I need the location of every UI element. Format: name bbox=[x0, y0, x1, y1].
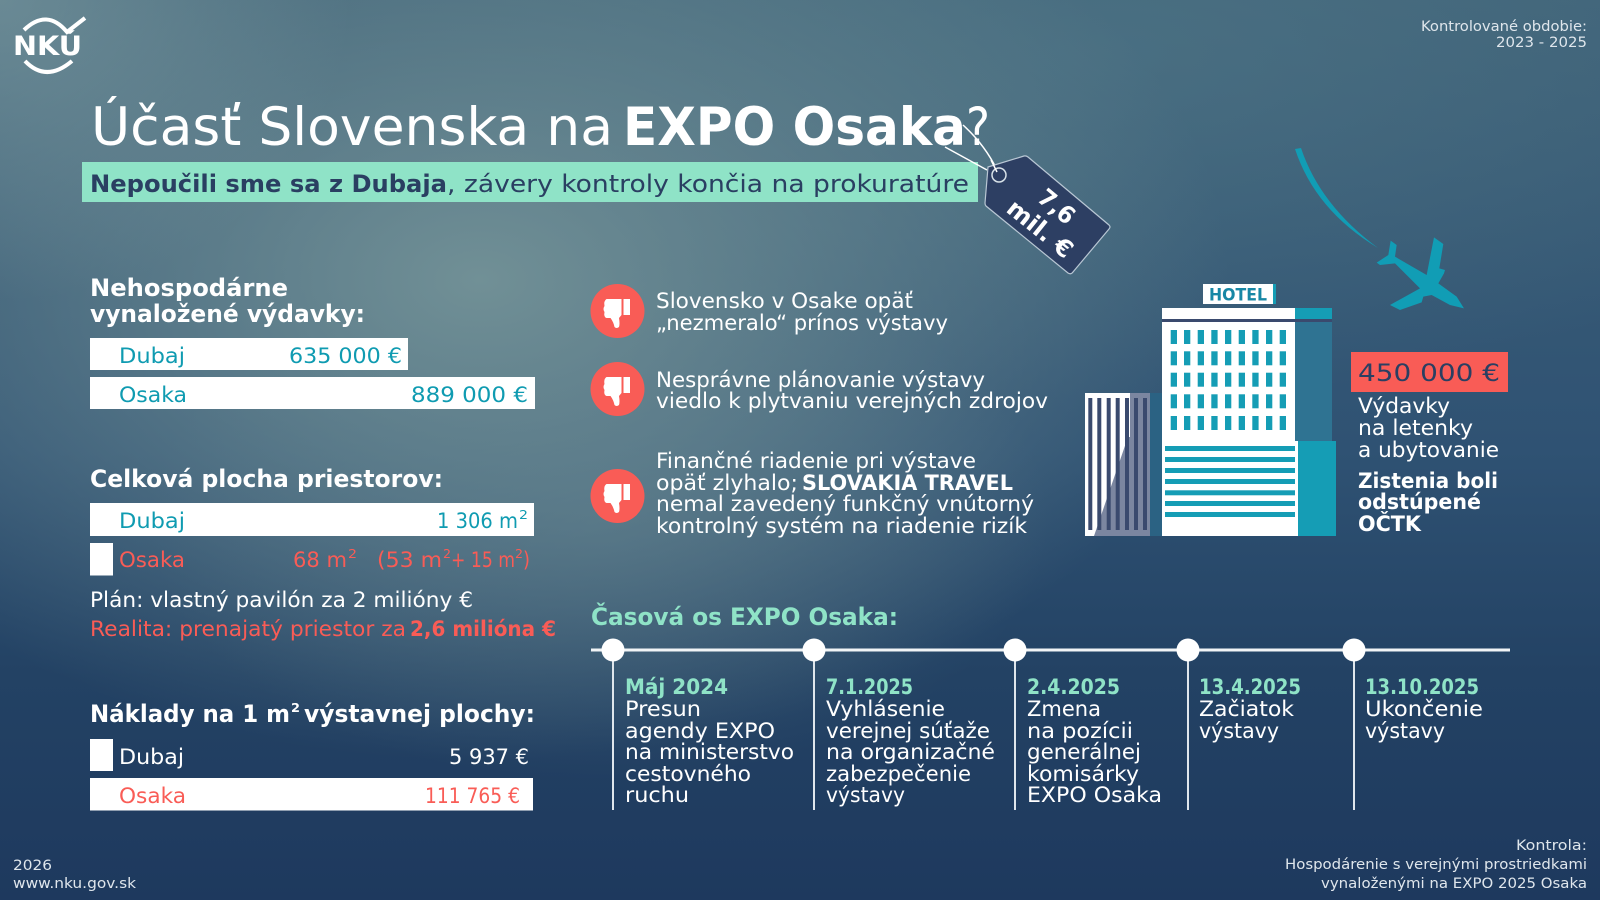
callout: flight and accommodation cost: odstúpené bbox=[1358, 490, 1481, 514]
milestone: Máj 2024: cestovného bbox=[625, 762, 751, 786]
bar: Osaka: ) bbox=[523, 548, 530, 572]
milestone: 13.10.2025 bbox=[1365, 675, 1483, 743]
panel: wasteful expenses bbox=[90, 274, 535, 409]
callout: flight and accommodation cost: OČTK bbox=[1358, 511, 1422, 536]
icon: hotel buildings: HOTEL bbox=[1209, 286, 1267, 306]
milestone: Máj 2024: na ministerstvo bbox=[625, 740, 794, 764]
panel: total floor area bbox=[90, 465, 556, 641]
callout: flight and accommodation cost: Zistenia boli bbox=[1358, 469, 1498, 493]
icon: hotel buildings bbox=[1085, 284, 1336, 536]
price tag 7,6 mil. €: mil. € bbox=[1001, 194, 1079, 264]
milestone: 2.4.2025: na pozícii bbox=[1027, 719, 1133, 743]
callout: flight and accommodation cost: a ubytovanie bbox=[1358, 438, 1499, 462]
bar: Osaka: 68 m bbox=[293, 548, 347, 572]
heading: Nehospodárne bbox=[90, 274, 288, 302]
milestone: 13.4.2025 bbox=[1199, 675, 1301, 743]
subtitle banner: , závery kontroly končia na prokuratúre bbox=[447, 170, 969, 198]
milestone: 2.4.2025: 2.4.2025 bbox=[1027, 675, 1120, 699]
callout: flight and accommodation cost bbox=[1351, 352, 1508, 536]
text bbox=[656, 289, 948, 335]
text: opäť zlyhalo; bbox=[656, 471, 798, 495]
footer: audit name: Hospodárenie s verejnými prostriedkami bbox=[1285, 857, 1587, 873]
panel: cost per m2 bbox=[90, 700, 535, 810]
footer: audit name: vynaloženými na EXPO 2025 Osaka bbox=[1321, 876, 1587, 892]
heading: Celková plocha priestorov: bbox=[90, 465, 443, 493]
bar: Dubaj: 2 bbox=[519, 508, 528, 522]
finding 3 bbox=[590, 449, 1034, 538]
text: nemal zavedený funkčný vnútorný bbox=[656, 492, 1034, 516]
text: Finančné riadenie pri výstave bbox=[656, 449, 976, 473]
milestone: 2.4.2025: EXPO Osaka bbox=[1027, 783, 1162, 807]
milestone: 13.4.2025: Začiatok bbox=[1199, 697, 1295, 721]
timeline heading: Časová os EXPO Osaka: bbox=[591, 601, 898, 631]
milestone: 7.1.2025: výstavy bbox=[826, 783, 905, 807]
bar: Osaka bbox=[90, 377, 535, 409]
milestone: 2.4.2025 bbox=[1027, 675, 1162, 807]
logo NKU bbox=[13, 18, 85, 72]
control period: Kontrolované obdobie: bbox=[1421, 19, 1587, 35]
control period: 2023 - 2025 bbox=[1496, 35, 1587, 51]
finding 2 bbox=[590, 362, 1048, 416]
text: viedlo k plytvaniu verejných zdrojov bbox=[656, 389, 1048, 413]
bar: Dubaj: Dubaj bbox=[119, 745, 184, 769]
price tag 7,6 mil. € bbox=[945, 125, 1110, 274]
milestone: 13.10.2025: Ukončenie bbox=[1365, 697, 1483, 721]
title bbox=[91, 95, 990, 158]
heading: Náklady na 1 m bbox=[90, 700, 290, 728]
milestone: 2.4.2025: generálnej bbox=[1027, 740, 1141, 764]
milestone: 7.1.2025: zabezpečenie bbox=[826, 762, 971, 786]
subtitle banner: Nepoučili sme sa z Dubaja bbox=[90, 170, 447, 198]
footer: audit name: Kontrola: bbox=[1516, 838, 1587, 854]
milestone: 7.1.2025: 7.1.2025 bbox=[826, 675, 913, 699]
bar: Dubaj: Dubaj bbox=[119, 344, 185, 368]
bar: Osaka: 2 bbox=[348, 547, 357, 561]
heading bbox=[90, 700, 535, 728]
bar: Osaka: 889 000 € bbox=[411, 383, 528, 407]
timeline bbox=[591, 638, 1510, 810]
control period bbox=[1421, 19, 1587, 51]
milestone: Máj 2024: Máj 2024 bbox=[625, 675, 728, 699]
price tag 7,6 mil. €: 7,6 bbox=[1032, 183, 1081, 230]
milestone: Máj 2024: agendy EXPO bbox=[625, 719, 775, 743]
plan vs reality note bbox=[90, 588, 556, 641]
milestone: 7.1.2025 bbox=[826, 675, 995, 807]
milestone: Máj 2024 bbox=[625, 675, 794, 807]
bar: Dubaj: 5 937 € bbox=[449, 745, 529, 769]
callout: flight and accommodation cost: 450 000 € bbox=[1358, 359, 1500, 387]
text: kontrolný systém na riadenie rizík bbox=[656, 514, 1028, 538]
milestone: Máj 2024: ruchu bbox=[625, 783, 689, 807]
footer: year and website: 2026 bbox=[13, 858, 52, 874]
plan vs reality note: 2,6 milióna € bbox=[410, 617, 556, 641]
plan vs reality note: Plán: vlastný pavilón za 2 milióny € bbox=[90, 588, 473, 612]
milestone: 13.10.2025: 13.10.2025 bbox=[1365, 675, 1479, 699]
icon: thumbs down bbox=[590, 362, 644, 416]
icon: thumbs down bbox=[590, 284, 644, 338]
milestone: 13.4.2025: výstavy bbox=[1199, 719, 1279, 743]
heading: 2 bbox=[291, 701, 300, 715]
text: Nesprávne plánovanie výstavy bbox=[656, 368, 985, 392]
callout: flight and accommodation cost: Výdavky bbox=[1358, 394, 1450, 418]
bar: Dubaj: 1 306 m bbox=[437, 509, 518, 533]
icon: thumbs down bbox=[590, 469, 644, 523]
finding 1 bbox=[590, 284, 948, 338]
bar: Dubaj: 635 000 € bbox=[289, 344, 402, 368]
bar: Dubaj bbox=[90, 338, 408, 370]
milestone: 7.1.2025: Vyhlásenie bbox=[826, 697, 945, 721]
bar: Dubaj bbox=[90, 739, 529, 771]
milestone: 7.1.2025: na organizačné bbox=[826, 740, 995, 764]
bar: Osaka: 2 bbox=[515, 547, 523, 561]
plan vs reality note: Realita: prenajatý priestor za bbox=[90, 617, 406, 641]
bar: Osaka: Osaka bbox=[119, 383, 187, 407]
milestone: 7.1.2025: verejnej súťaže bbox=[826, 719, 990, 743]
subtitle banner bbox=[82, 162, 978, 202]
logo NKU: NKÚ bbox=[13, 30, 82, 62]
heading: výstavnej plochy: bbox=[304, 700, 535, 728]
bar: Osaka: + 15 m bbox=[451, 548, 515, 572]
bar: Osaka bbox=[90, 778, 533, 810]
icon: airplane with trail bbox=[1295, 148, 1464, 310]
footer: year and website bbox=[13, 858, 137, 892]
footer: audit name bbox=[1285, 838, 1587, 892]
bar: Osaka: Osaka bbox=[119, 784, 186, 808]
text: „nezmeralo“ prínos výstavy bbox=[656, 311, 948, 335]
text: Slovensko v Osake opäť bbox=[656, 289, 913, 313]
bar: Osaka: Osaka bbox=[119, 548, 185, 572]
bar: Osaka: 111 765 € bbox=[425, 784, 520, 808]
milestone: 2.4.2025: Zmena bbox=[1027, 697, 1101, 721]
title: EXPO Osaka bbox=[623, 97, 966, 158]
milestone: 2.4.2025: komisárky bbox=[1027, 762, 1139, 786]
milestone: 13.4.2025: 13.4.2025 bbox=[1199, 675, 1301, 699]
text bbox=[656, 449, 1034, 538]
footer: year and website: www.nku.gov.sk bbox=[13, 876, 137, 892]
bar: Dubaj bbox=[90, 503, 534, 536]
callout: flight and accommodation cost: na letenky bbox=[1358, 416, 1473, 440]
milestone: Máj 2024: Presun bbox=[625, 697, 701, 721]
bar: Osaka: (53 m bbox=[377, 548, 442, 572]
bar: Osaka bbox=[90, 543, 530, 576]
text: SLOVAKIA TRAVEL bbox=[802, 471, 1013, 495]
heading: vynaložené výdavky: bbox=[90, 300, 365, 328]
title: Účasť Slovenska na bbox=[91, 95, 613, 158]
milestone: 13.10.2025: výstavy bbox=[1365, 719, 1445, 743]
title: ? bbox=[966, 97, 990, 158]
bar: Osaka: 2 bbox=[443, 547, 451, 561]
heading bbox=[90, 274, 365, 328]
bar: Dubaj: Dubaj bbox=[119, 509, 185, 533]
text bbox=[656, 368, 1048, 413]
